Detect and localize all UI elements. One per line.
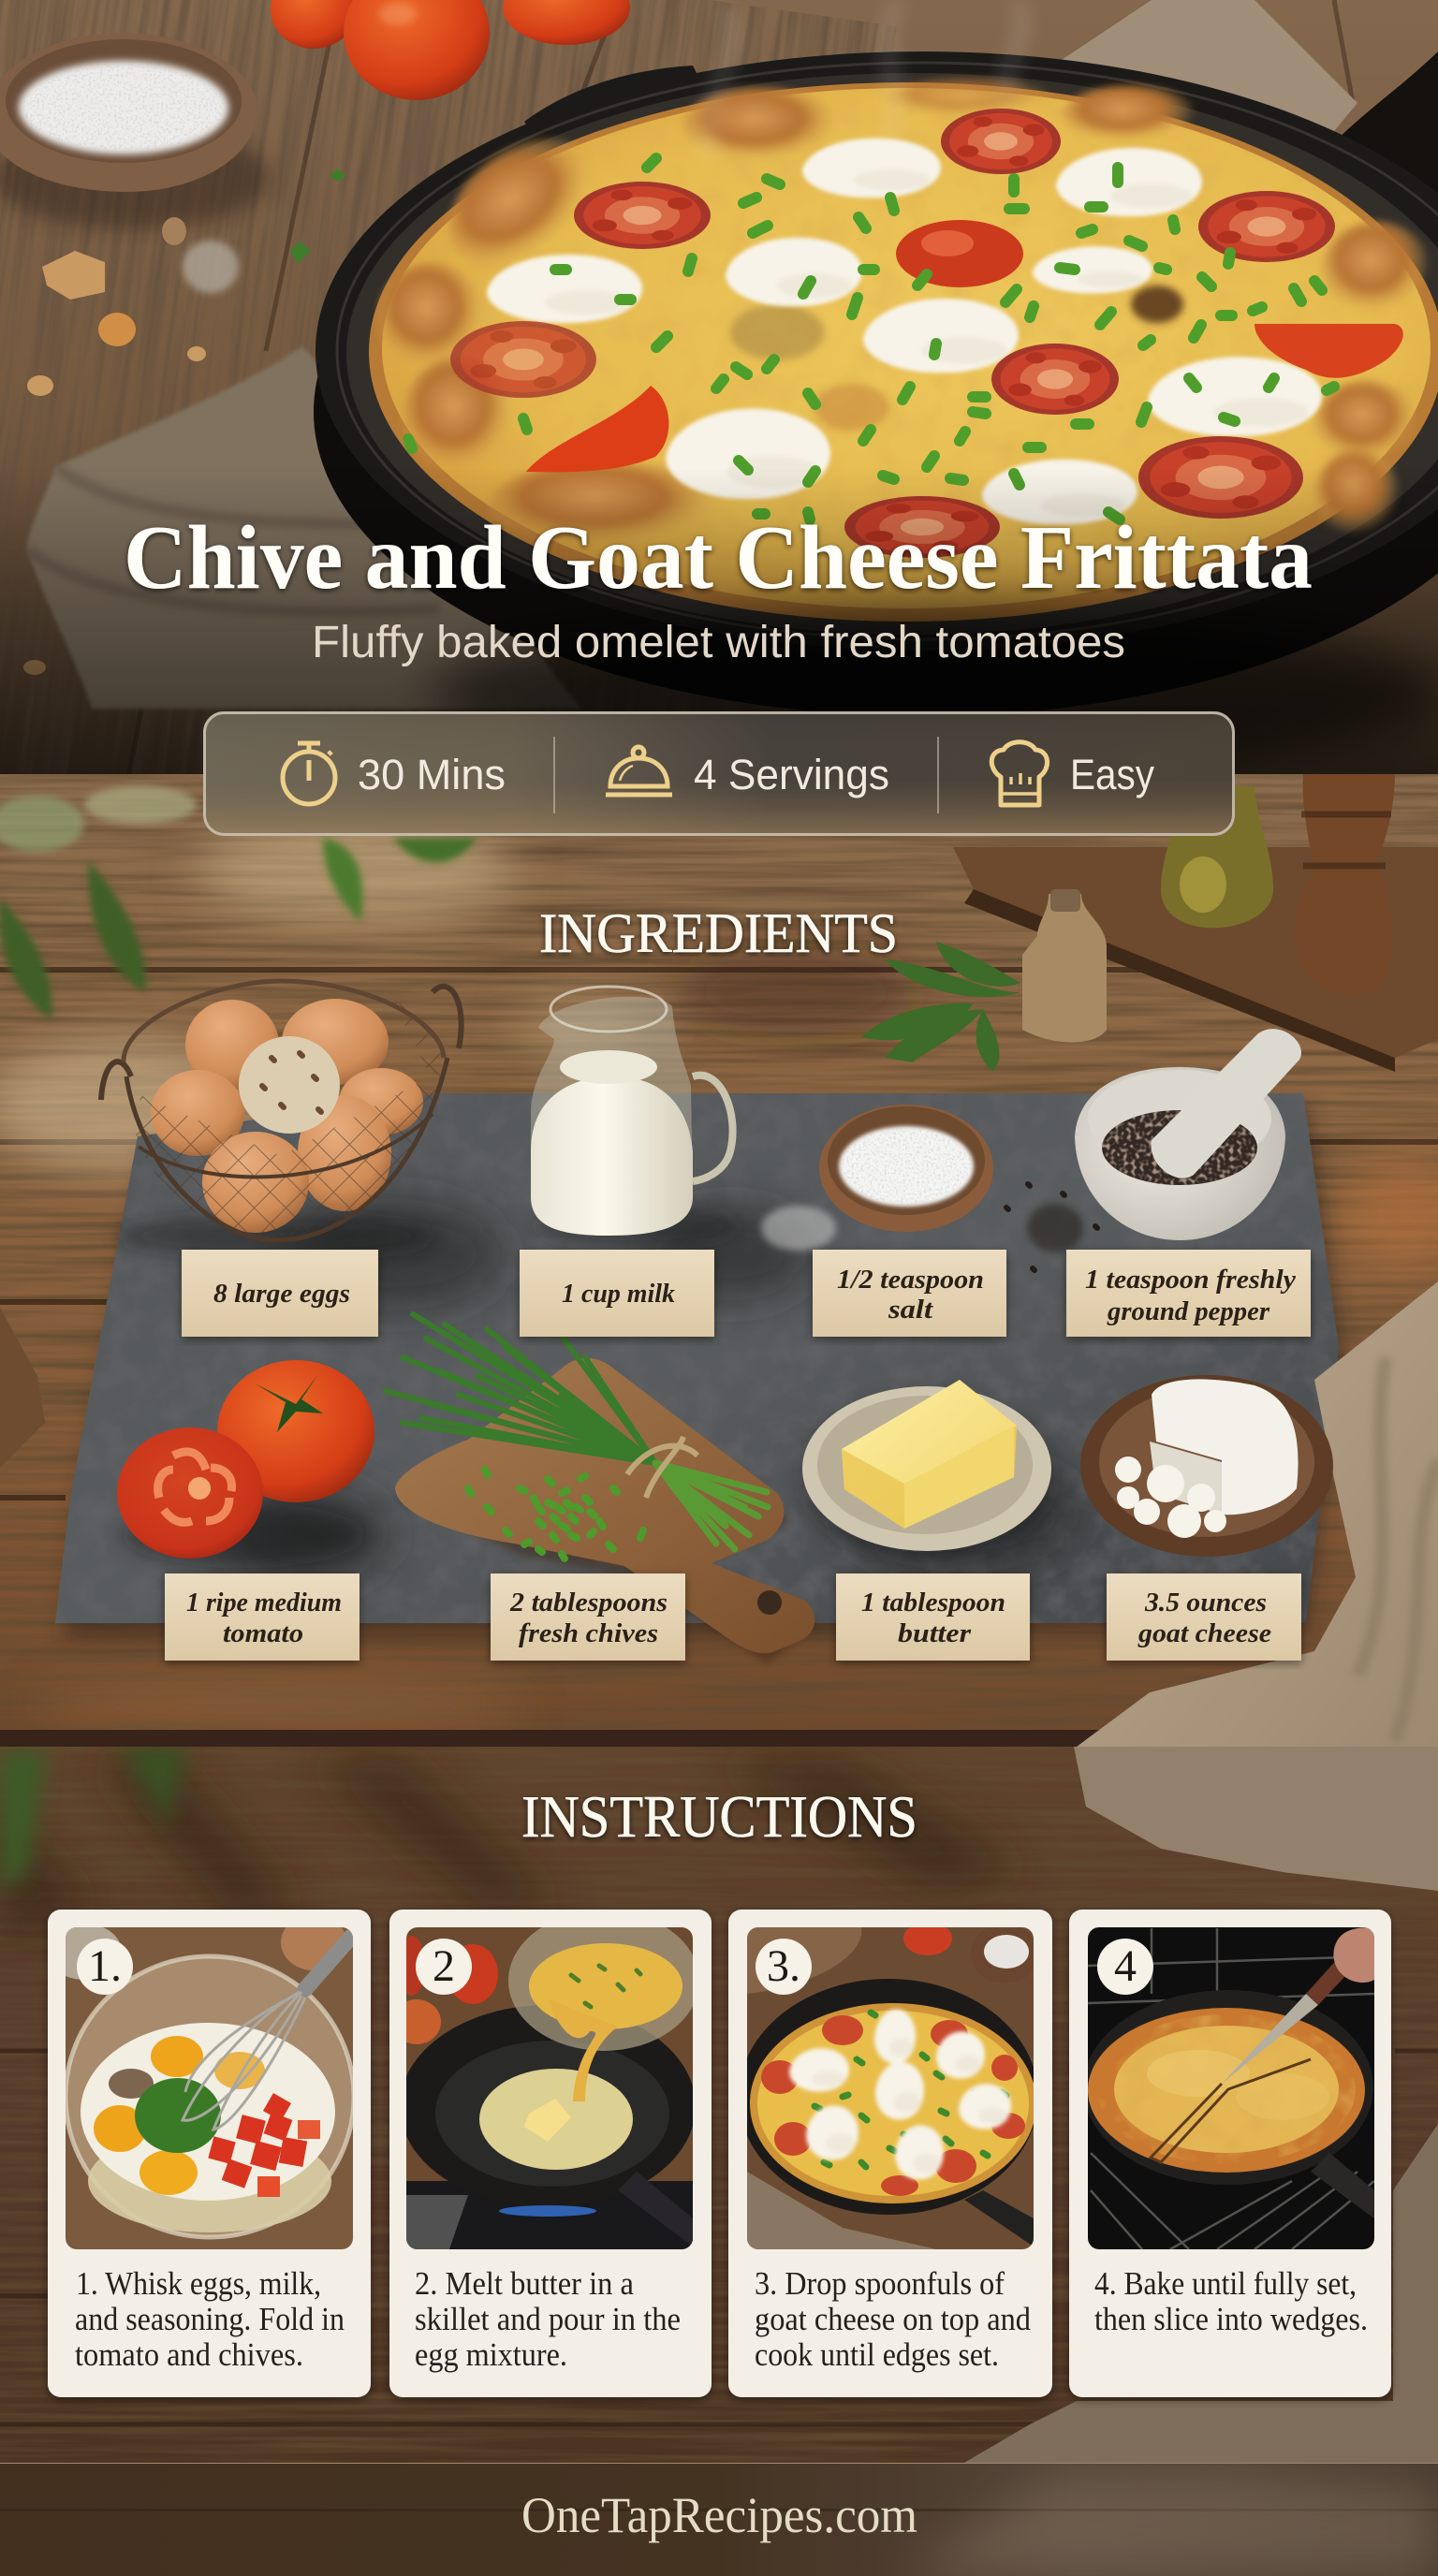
step 2 text: skillet and pour in the (415, 2301, 681, 2337)
step card 3 (728, 1910, 1052, 2397)
step 2 text: 2. Melt butter in a (415, 2265, 634, 2302)
label: 1/2 teaspoon salt: 1/2 teaspoon (837, 1265, 984, 1295)
label: 1/2 teaspoon salt: salt (888, 1295, 933, 1325)
panel: hero photo (0, 0, 1438, 774)
ingredient: butter on plate (800, 1380, 1053, 1559)
label: 2 tablespoons fresh chives: 2 tablespoons (509, 1588, 668, 1617)
step 2 photo: pouring egg into skillet (392, 1910, 699, 2249)
chopped chives pile (468, 1470, 643, 1559)
label: 1 tablespoon butter (836, 1573, 1030, 1661)
label: 1 ripe medium tomato: 1 ripe medium (186, 1588, 342, 1617)
goat cheese dollops (487, 139, 1322, 524)
hero title: Chive and Goat Cheese Frittata (124, 507, 1313, 608)
label: 3.5 ounces goat cheese: 3.5 ounces (1144, 1588, 1267, 1617)
label: 1 cup milk: 1 cup milk (562, 1279, 675, 1309)
panel: instructions background (0, 1747, 1438, 2463)
step 1 text: 1. Whisk eggs, milk, (76, 2265, 321, 2302)
footer brand text: OneTapRecipes.com (521, 2487, 917, 2543)
fresh herb leaves (861, 942, 1020, 1072)
step 4 photo: slicing baked frittata in oven (1083, 1927, 1374, 2249)
label: 1 ripe medium tomato: tomato (223, 1618, 303, 1648)
icon: chef hat (991, 742, 1048, 805)
linen cloth corners (964, 1747, 1438, 2463)
label: 3.5 ounces goat cheese: goat cheese (1137, 1618, 1271, 1648)
step card 4 (1069, 1910, 1391, 2397)
label: 3.5 ounces goat cheese (1107, 1573, 1301, 1661)
icon: stopwatch (283, 743, 335, 804)
label: 2 tablespoons fresh chives (491, 1573, 685, 1661)
label: 8 large eggs: 8 large eggs (213, 1279, 350, 1309)
hero subtitle: Fluffy baked omelet with fresh tomatoes (312, 618, 1125, 667)
step 2 number badge: 2 (433, 1941, 455, 1991)
step 4 number badge: 4 (1114, 1941, 1137, 1991)
stat: easy: Easy (1070, 751, 1154, 798)
ingredient: chives on cutting board (386, 1303, 818, 1663)
wooden board, oil and pepper mill (953, 774, 1438, 1072)
label: 1 tablespoon butter: 1 tablespoon (861, 1588, 1005, 1617)
folded linen cloth (27, 0, 1357, 709)
ingredient: whole and halved tomatoes (117, 1360, 374, 1568)
heading: instructions: INSTRUCTIONS (521, 1783, 917, 1850)
ingredient: eggs in wire basket (101, 981, 462, 1256)
label: 8 large eggs (182, 1250, 378, 1337)
step 3 photo: cheese on frittata (739, 1922, 1038, 2249)
label: 1 teaspoon freshly ground pepper: ground pepper (1107, 1296, 1270, 1326)
stat: 4 servings: 4 Servings (694, 751, 889, 798)
step 1 text: and seasoning. Fold in (75, 2301, 345, 2337)
step card 1 (47, 1910, 371, 2397)
step 1 number badge (77, 1939, 133, 1995)
step 2 text (415, 2265, 681, 2373)
step 1 photo: whisking in a glass bowl (47, 1914, 354, 2249)
crumbs and salt on table (23, 168, 346, 675)
icon: cherry tomatoes (271, 0, 630, 100)
label: 1 teaspoon freshly ground pepper: 1 teaspoon freshly (1085, 1265, 1296, 1295)
step 4 text: then slice into wedges. (1094, 2301, 1368, 2337)
label: 1 tablespoon butter: butter (898, 1618, 972, 1648)
panel: footer (0, 2462, 1438, 2576)
right linen cloth (1077, 1281, 1438, 1747)
step 3 text: goat cheese on top and (755, 2301, 1031, 2337)
label: 1 cup milk (520, 1250, 714, 1337)
step 2 text: egg mixture. (415, 2336, 567, 2373)
step 1 text: tomato and chives. (75, 2336, 303, 2373)
step 3 number badge: 3. (767, 1941, 800, 1991)
label: 1 ripe medium tomato (165, 1573, 360, 1661)
chive bunch stems (386, 1303, 768, 1549)
ingredient: pepper mortar and pestle (1006, 1029, 1301, 1270)
cast iron skillet (314, 51, 1438, 716)
stat: 30 mins: 30 Mins (358, 751, 506, 798)
ingredient: salt bowl (761, 1105, 993, 1251)
icon: bowl of salt (0, 33, 271, 229)
golden browned crust blobs (377, 78, 1431, 550)
step 1 text (75, 2265, 345, 2373)
step 3 number badge (756, 1939, 812, 1995)
step 3 text (755, 2265, 1031, 2373)
panel: ingredients background (0, 774, 1438, 1747)
label: 1/2 teaspoon salt (813, 1250, 1006, 1337)
stats bar (203, 711, 1235, 836)
slate board (55, 1093, 1344, 1638)
step 3 text: cook until edges set. (755, 2336, 999, 2373)
heading: ingredients: INGREDIENTS (539, 902, 898, 964)
ingredient: goat cheese on plate (1080, 1375, 1333, 1557)
ingredient: milk pitcher (531, 987, 740, 1247)
label: 2 tablespoons fresh chives: fresh chives (519, 1618, 658, 1648)
frittata (369, 78, 1438, 622)
step 1 number badge: 1. (88, 1941, 122, 1991)
small cork bottle (1022, 889, 1107, 1043)
left folded cloth (0, 1308, 45, 1468)
blurred leaves (0, 786, 477, 1020)
step 4 text (1094, 2265, 1368, 2337)
step 3 text: 3. Drop spoonfuls of (755, 2265, 1005, 2302)
tomato slices (450, 109, 1403, 558)
step 4 number badge (1097, 1939, 1153, 1995)
step 4 text: 4. Bake until fully set, (1094, 2265, 1357, 2302)
icon: serving cloche (606, 747, 672, 795)
step card 2 (389, 1910, 712, 2397)
label: 1 teaspoon freshly ground pepper (1066, 1250, 1311, 1337)
step 2 number badge (416, 1939, 472, 1995)
steam (708, 0, 1022, 159)
chopped chives (408, 158, 1334, 520)
